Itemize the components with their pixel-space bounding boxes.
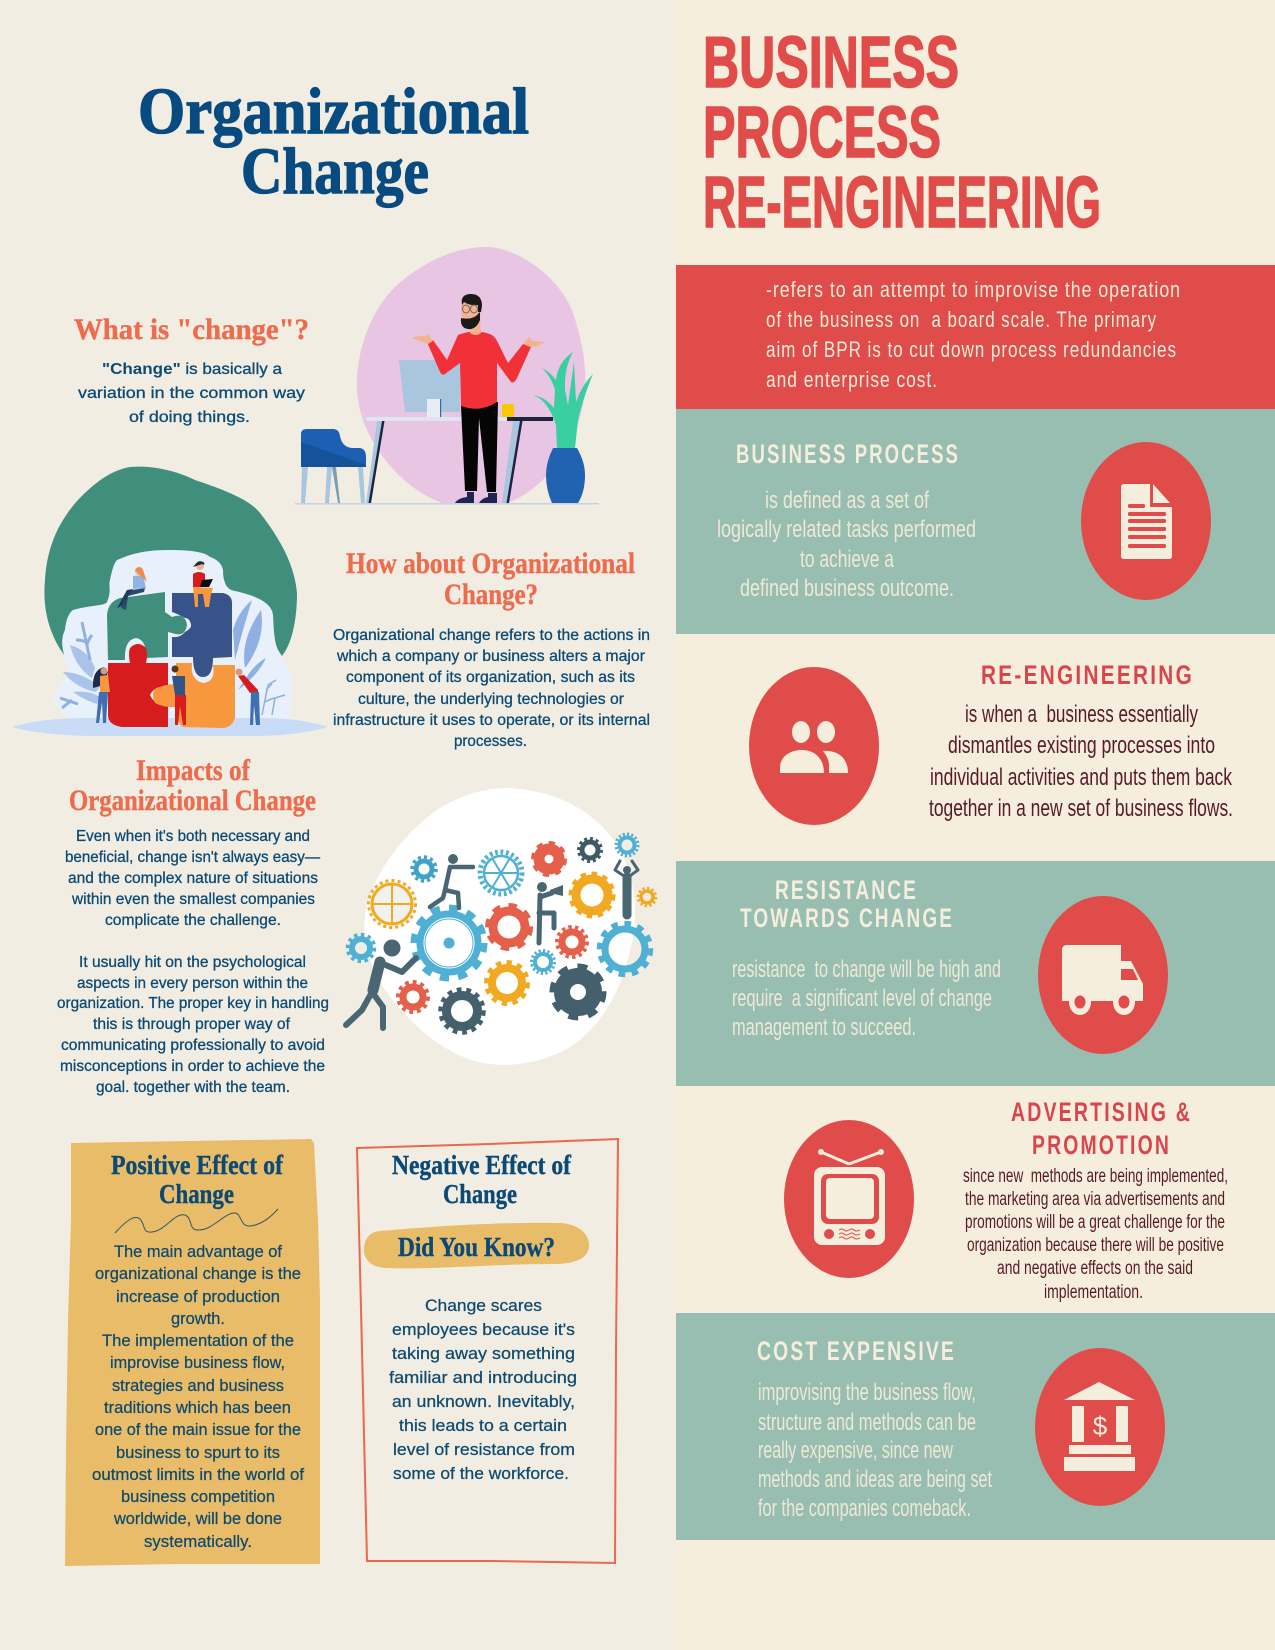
title: Organizational Change: Organizational	[138, 75, 529, 148]
text block: organization. The proper key in handling	[57, 995, 329, 1012]
title: Business Process Re-Engineering: PROCESS	[703, 93, 941, 173]
text block: Even when it's both necessary and	[76, 828, 310, 845]
text block: and the complex nature of situations	[68, 870, 318, 887]
text block: "Change" is basically a	[102, 361, 282, 378]
panel: BPR definition	[676, 265, 1275, 409]
heading: TOWARDS CHANGE	[740, 903, 954, 933]
title: Organizational Change	[138, 75, 529, 208]
text block: familiar and introducing	[389, 1369, 577, 1387]
text block: business to spurt to its	[116, 1444, 280, 1462]
panel: business process	[676, 409, 1275, 634]
illustration: man at desk	[295, 247, 599, 504]
text block: structure and methods can be	[758, 1409, 976, 1436]
section: what is change: of doing things.	[129, 409, 250, 426]
text block	[758, 1379, 992, 1522]
text block: to achieve a	[800, 546, 894, 573]
text block: require a significant level of change	[732, 985, 992, 1012]
section: advertising and promotion	[784, 1097, 1228, 1303]
left column background	[0, 0, 676, 1650]
section: what is change	[74, 313, 309, 426]
text block	[929, 701, 1233, 822]
text block: improvising the business flow,	[758, 1379, 976, 1406]
text block: taking away something	[392, 1345, 575, 1363]
illustration: people and gears	[346, 788, 656, 1065]
text block: component of its organization, such as its	[346, 669, 635, 686]
squiggle underline	[115, 1209, 278, 1233]
text block: The implementation of the	[102, 1332, 294, 1350]
heading: Organizational Change	[69, 784, 316, 817]
text block: logically related tasks performed	[717, 516, 976, 543]
heading: COST EXPENSIVE	[757, 1336, 956, 1366]
heading	[392, 1150, 572, 1209]
text block: Organizational change refers to the actions in	[333, 627, 650, 644]
panel: resistance towards change	[676, 861, 1275, 1086]
text block: culture, the underlying technologies or	[358, 691, 625, 708]
text block: systematically.	[144, 1533, 252, 1551]
text block: defined business outcome.	[740, 575, 954, 602]
text block: is defined as a set of	[765, 487, 929, 514]
text block: The main advantage of	[114, 1243, 282, 1261]
heading: Change	[159, 1179, 234, 1209]
right column background	[676, 0, 1275, 1650]
panel: BPR definition: and enterprise cost.	[766, 367, 938, 392]
icon: truck	[1038, 896, 1168, 1054]
text block: business competition	[121, 1488, 275, 1506]
icon: bank	[1035, 1348, 1165, 1506]
heading	[111, 1150, 284, 1209]
text block	[57, 828, 329, 1096]
text block: It usually hit on the psychological	[79, 954, 306, 971]
illustration: puzzle team	[12, 467, 328, 736]
text block: this is through proper way of	[93, 1016, 291, 1033]
text block: an unknown. Inevitably,	[392, 1393, 575, 1411]
callout: did you know	[364, 1223, 589, 1268]
callout: did you know: Did You Know?	[398, 1232, 555, 1262]
text block	[732, 956, 1001, 1041]
text block: implementation.	[1044, 1282, 1143, 1303]
text block: some of the workforce.	[393, 1465, 569, 1483]
heading: Change?	[444, 578, 538, 611]
text block: worldwide, will be done	[113, 1510, 282, 1528]
text block: for the companies comeback.	[758, 1495, 971, 1522]
heading: Impacts of	[136, 754, 251, 787]
heading: RESISTANCE	[775, 875, 918, 905]
text block: outmost limits in the world of	[92, 1466, 304, 1484]
text block: misconceptions in order to achieve the	[60, 1058, 325, 1075]
text block: level of resistance from	[393, 1441, 575, 1459]
heading: ADVERTISING &	[1011, 1097, 1192, 1127]
text block: traditions which has been	[104, 1399, 291, 1417]
heading: Change	[443, 1179, 517, 1209]
heading: PROMOTION	[1032, 1130, 1171, 1160]
icon: television	[784, 1120, 914, 1278]
text block: which a company or business alters a major	[336, 648, 646, 665]
panel: BPR definition: -refers to an attempt to improvise the operation	[766, 277, 1181, 302]
text block: within even the smallest companies	[71, 891, 315, 908]
heading: BUSINESS PROCESS	[736, 439, 960, 469]
panel: positive effect of change	[65, 1139, 320, 1566]
text block: methods and ideas are being set	[758, 1466, 992, 1493]
text block: strategies and business	[112, 1377, 284, 1395]
heading	[346, 547, 635, 611]
text block: employees because it's	[392, 1321, 575, 1339]
heading: RE-ENGINEERING	[981, 660, 1194, 690]
text block: and negative effects on the said	[997, 1258, 1193, 1279]
text block	[92, 1243, 304, 1551]
section: impacts of organizational change	[57, 754, 329, 1096]
text block: Change scares	[425, 1297, 542, 1315]
text block: increase of production	[116, 1288, 280, 1306]
text block: beneficial, change isn't always easy—	[65, 849, 320, 866]
title: Business Process Re-Engineering	[703, 23, 1101, 243]
title: Business Process Re-Engineering: BUSINESS	[703, 23, 959, 103]
text block: organizational change is the	[95, 1265, 301, 1283]
text block: complicate the challenge.	[105, 912, 281, 929]
heading: What is "change"?	[74, 313, 309, 346]
icon: document	[1081, 442, 1211, 600]
text block: improvise business flow,	[110, 1354, 285, 1372]
heading	[1011, 1097, 1192, 1160]
section: re-engineering	[749, 660, 1233, 825]
panel: cost expensive	[676, 1313, 1275, 1540]
text block: growth.	[171, 1310, 225, 1328]
heading	[69, 754, 316, 817]
title: Organizational Change: Change	[241, 135, 429, 208]
panel: BPR definition: of the business on a board scale. The primary	[766, 307, 1157, 332]
panel: negative effect of change	[357, 1139, 618, 1563]
section: how about organizational change	[333, 547, 650, 750]
text block: management to succeed.	[732, 1014, 916, 1041]
section: what is change: variation in the common way	[78, 385, 305, 402]
text block	[963, 1166, 1228, 1303]
text block: really expensive, since new	[758, 1437, 953, 1464]
text block	[389, 1297, 577, 1483]
text block: this leads to a certain	[399, 1417, 567, 1435]
text block: processes.	[454, 733, 527, 750]
icon: bank: $	[1093, 1411, 1108, 1441]
text block: one of the main issue for the	[95, 1421, 301, 1439]
heading: How about Organizational	[346, 547, 635, 580]
text block	[717, 487, 976, 602]
heading	[740, 875, 954, 933]
heading: Negative Effect of	[392, 1150, 572, 1180]
heading: Positive Effect of	[111, 1150, 284, 1180]
text block: goal. together with the team.	[96, 1079, 290, 1096]
text block: infrastructure it uses to operate, or its internal	[333, 712, 650, 729]
text block	[333, 627, 650, 750]
text block: aspects in every person within the	[77, 975, 308, 992]
text block: resistance to change will be high and	[732, 956, 1001, 983]
text block: communicating professionally to avoid	[61, 1037, 325, 1054]
icon: people	[749, 667, 879, 825]
